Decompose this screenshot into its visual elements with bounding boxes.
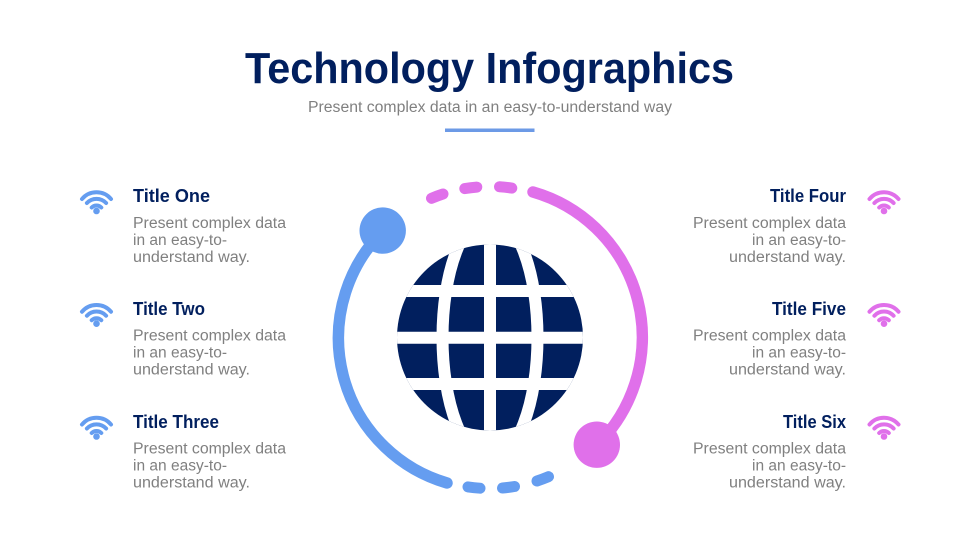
- item: Title Two: in an easy-to-: [133, 345, 227, 362]
- title underline: [445, 128, 534, 132]
- ring: blue arc with node: [338, 207, 548, 488]
- item: Title Five: Present complex data: [693, 328, 846, 345]
- item: Title Six: in an easy-to-: [752, 458, 846, 474]
- icon: wifi: [82, 305, 111, 327]
- item: Title Six: Title Six: [783, 412, 846, 432]
- item: Title Three: understand way.: [133, 474, 250, 492]
- item: Title Five: Title Five: [772, 299, 846, 319]
- item: Title One: Present complex data: [133, 215, 286, 232]
- icon: wifi: [870, 192, 898, 214]
- item: Title Four: in an easy-to-: [752, 232, 846, 249]
- icon: wifi: [82, 192, 111, 214]
- item: Title Four: [693, 186, 898, 266]
- item: Title Two: understand way.: [133, 362, 250, 379]
- item: Title Three: [82, 412, 286, 492]
- item: Title Six: Present complex data: [693, 440, 846, 458]
- item: Title Five: in an easy-to-: [752, 345, 846, 362]
- item: Title Three: in an easy-to-: [133, 458, 227, 474]
- item: Title Four: Title Four: [770, 186, 846, 206]
- globe icon: [397, 244, 583, 430]
- icon: wifi: [870, 418, 898, 440]
- item: Title Six: understand way.: [729, 474, 846, 492]
- title: Technology Infographics: [245, 44, 734, 93]
- icon: wifi: [870, 305, 898, 327]
- item: Title Two: [82, 299, 286, 379]
- item: Title Three: Present complex data: [133, 440, 286, 458]
- item: Title Four: Present complex data: [693, 215, 846, 232]
- item: Title Five: understand way.: [729, 362, 846, 379]
- item: Title Three: Title Three: [133, 412, 219, 432]
- icon: wifi: [82, 418, 111, 440]
- item: Title One: Title One: [133, 186, 210, 206]
- item: Title Two: Present complex data: [133, 328, 286, 345]
- item: Title Six: [693, 412, 898, 492]
- item: Title Five: [693, 299, 898, 379]
- item: Title One: [82, 186, 286, 266]
- subtitle: Present complex data in an easy-to-understand way: [308, 99, 672, 116]
- item: Title One: in an easy-to-: [133, 232, 227, 249]
- item: Title Four: understand way.: [729, 249, 846, 266]
- item: Title One: understand way.: [133, 249, 250, 266]
- ring: pink arc with node: [432, 187, 642, 468]
- item: Title Two: Title Two: [133, 299, 205, 319]
